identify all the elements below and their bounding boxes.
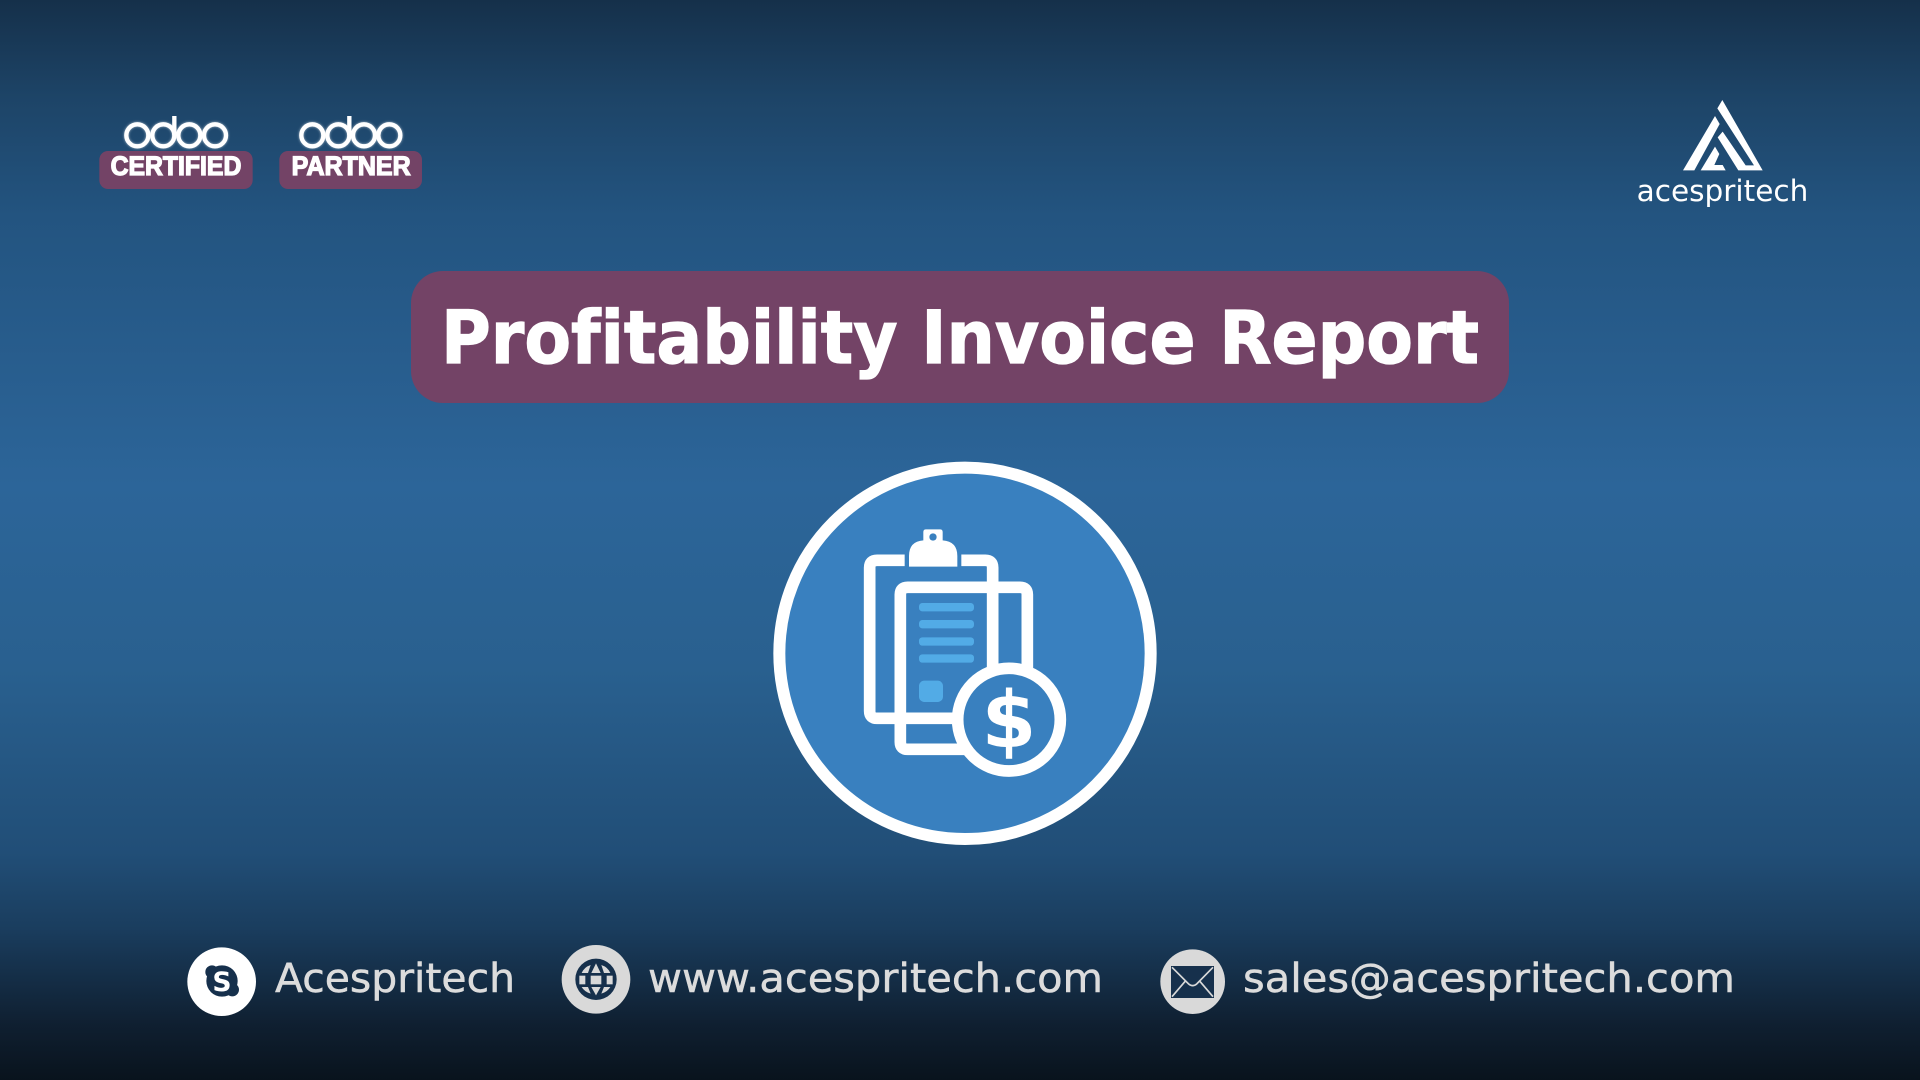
title banner	[411, 271, 1509, 403]
certified label: CERTIFIED	[111, 151, 241, 181]
badge: odoo certified	[99, 116, 253, 189]
sheet lines	[919, 603, 974, 702]
logo wordmark: acespritech	[1637, 174, 1808, 208]
website address: www.acespritech.com	[648, 956, 1103, 1002]
skype name: Acespritech	[275, 956, 515, 1002]
dollar coin	[958, 668, 1060, 771]
icon: skype	[187, 947, 256, 1016]
contact: email	[1160, 949, 1735, 1014]
icon: invoice clipboard with dollar coin	[779, 468, 1151, 839]
dollar sign: $	[982, 674, 1036, 766]
contact: skype	[187, 947, 515, 1016]
odoo wordmark: partner	[301, 116, 400, 146]
logo mark	[1683, 100, 1763, 170]
title text: Profitability Invoice Report	[441, 296, 1479, 381]
icon: envelope	[1160, 949, 1225, 1014]
clipboard clip	[909, 529, 957, 567]
odoo wordmark: certified	[126, 116, 226, 146]
circle badge	[779, 468, 1151, 839]
email address: sales@acespritech.com	[1243, 956, 1735, 1002]
partner pill	[279, 151, 422, 189]
icon: globe	[562, 945, 630, 1014]
badge: odoo partner	[279, 116, 422, 189]
back clipboard	[870, 560, 993, 718]
partner label: PARTNER	[292, 151, 411, 181]
contact: website	[562, 945, 1103, 1014]
logo: acespritech	[1637, 100, 1808, 208]
icon: skype: S	[212, 967, 232, 998]
front sheet	[900, 587, 1027, 749]
certified pill	[99, 151, 253, 189]
title pill	[411, 271, 1509, 403]
